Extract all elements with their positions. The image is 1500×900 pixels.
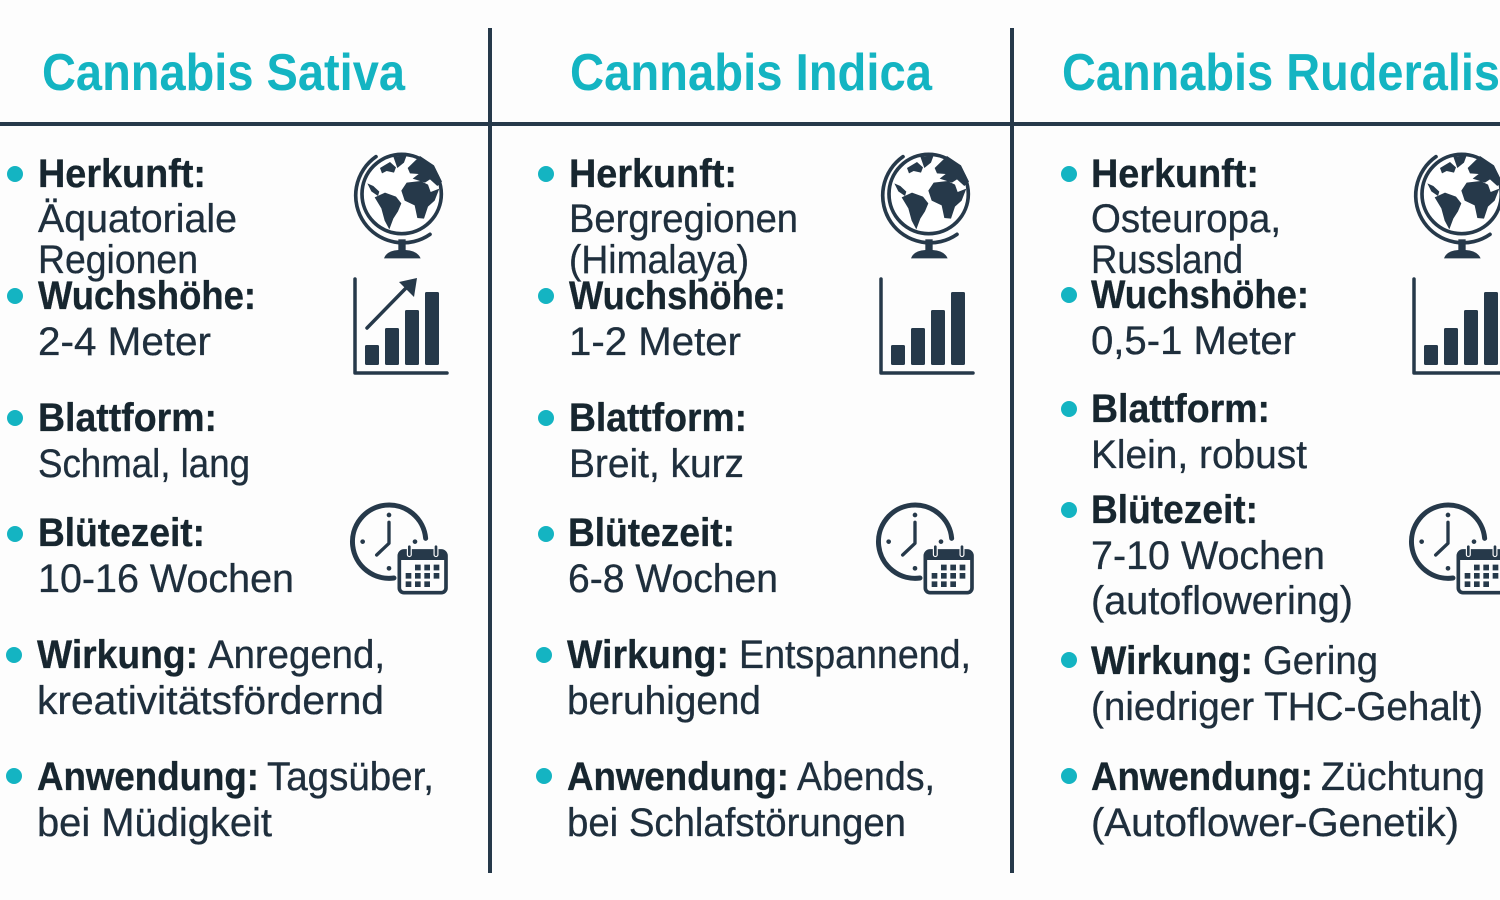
item: Herkunft: Bergregionen	[569, 197, 798, 241]
item: Wuchshöhe: Wuchshöhe:	[38, 274, 256, 318]
item: Anwendung	[6, 755, 434, 845]
item: Wirkung: Wirkung:	[567, 633, 729, 677]
icon: bar chart with arrow	[355, 278, 447, 373]
item: Wirkung: (niedriger THC-Gehalt)	[1091, 685, 1483, 729]
item: Herkunft: Äquatoriale	[38, 197, 237, 241]
item: Wirkung: Gering	[1263, 639, 1378, 683]
item: Blütezeit: 10-16 Wochen	[38, 557, 294, 601]
item: Herkunft: Regionen	[38, 238, 198, 282]
item: Anwendung: Züchtung	[1321, 755, 1485, 799]
item: Blattform: Blattform:	[569, 396, 747, 440]
item: Anwendung	[536, 755, 935, 845]
icon: clock and calendar	[352, 505, 446, 593]
item: Wirkung: kreativitätsfördernd	[37, 679, 384, 723]
item: Blütezeit	[538, 511, 778, 601]
item: Anwendung: Tagsüber,	[267, 755, 434, 799]
item: Wirkung	[6, 633, 385, 723]
item: Blütezeit: 6-8 Wochen	[568, 557, 778, 601]
item: Wirkung: beruhigend	[567, 679, 761, 723]
item: Herkunft: (Himalaya)	[569, 238, 749, 282]
item: Wirkung: Anregend,	[208, 633, 385, 677]
item: Blütezeit	[1061, 488, 1353, 623]
icon: bar chart	[881, 279, 973, 373]
item: Wuchshöhe: 1-2 Meter	[569, 320, 741, 364]
item: Blütezeit: Blütezeit:	[38, 511, 205, 555]
item: Wuchshöhe	[1061, 273, 1309, 363]
item: Wirkung	[1061, 639, 1483, 729]
item: Anwendung: (Autoflower-Genetik)	[1091, 801, 1459, 845]
panel: Cannabis Sativa	[6, 44, 447, 845]
item: Herkunft: Herkunft:	[569, 152, 737, 196]
item: Anwendung: Anwendung:	[567, 755, 789, 799]
item: Blütezeit: 7-10 Wochen	[1091, 534, 1325, 578]
item: Wirkung: Wirkung:	[1091, 639, 1253, 683]
panel: Cannabis Indica	[536, 44, 973, 845]
item: Blütezeit: (autoflowering)	[1091, 579, 1353, 623]
item: Wirkung	[536, 633, 971, 723]
item: Blattform	[1061, 387, 1307, 477]
icon: clock and calendar	[1411, 505, 1500, 593]
icon: bar chart	[1414, 279, 1500, 373]
icon: globe	[883, 154, 969, 258]
column divider left	[488, 28, 492, 873]
item: Wuchshöhe: 2-4 Meter	[38, 320, 211, 364]
panel: Cannabis Ruderalis	[1061, 44, 1500, 845]
item: Blattform: Blattform:	[1091, 387, 1270, 431]
item: Wuchshöhe	[7, 274, 256, 364]
item: Anwendung: Anwendung:	[37, 755, 259, 799]
item: Anwendung: Anwendung:	[1091, 755, 1313, 799]
item: Herkunft	[538, 152, 798, 282]
item: Blattform: Breit, kurz	[569, 442, 744, 486]
icon: globe	[356, 154, 442, 258]
icon: globe	[1416, 154, 1500, 258]
item: Herkunft: Herkunft:	[38, 152, 206, 196]
heading: Cannabis Indica: Cannabis Indica	[570, 44, 933, 102]
item: Blattform: Klein, robust	[1091, 433, 1307, 477]
item: Anwendung	[1061, 755, 1485, 845]
item: Blattform	[538, 396, 747, 486]
item: Wirkung: Wirkung:	[37, 633, 198, 677]
item: Wuchshöhe	[538, 274, 786, 364]
item: Herkunft	[1061, 152, 1281, 282]
item: Anwendung: bei Müdigkeit	[37, 801, 272, 845]
item: Herkunft: Russland	[1091, 238, 1243, 282]
item: Wirkung: Entspannend,	[739, 633, 971, 677]
horizontal header rule	[0, 122, 1500, 126]
item: Wuchshöhe: Wuchshöhe:	[569, 274, 786, 318]
item: Blattform: Schmal, lang	[38, 442, 250, 486]
item: Herkunft: Herkunft:	[1091, 152, 1259, 196]
item: Anwendung: Abends,	[797, 755, 935, 799]
item: Blütezeit	[7, 511, 294, 601]
item: Blütezeit: Blütezeit:	[1091, 488, 1258, 532]
item: Herkunft	[7, 152, 237, 282]
column divider right	[1010, 28, 1014, 873]
item: Blattform: Blattform:	[38, 396, 217, 440]
item: Blütezeit: Blütezeit:	[568, 511, 735, 555]
item: Anwendung: bei Schlafstörungen	[567, 801, 906, 845]
item: Wuchshöhe: 0,5-1 Meter	[1091, 319, 1296, 363]
icon: clock and calendar	[878, 505, 972, 593]
item: Wuchshöhe: Wuchshöhe:	[1091, 273, 1309, 317]
item: Herkunft: Osteuropa,	[1091, 197, 1281, 241]
heading: Cannabis Sativa: Cannabis Sativa	[42, 44, 406, 102]
item: Blattform	[7, 396, 250, 486]
